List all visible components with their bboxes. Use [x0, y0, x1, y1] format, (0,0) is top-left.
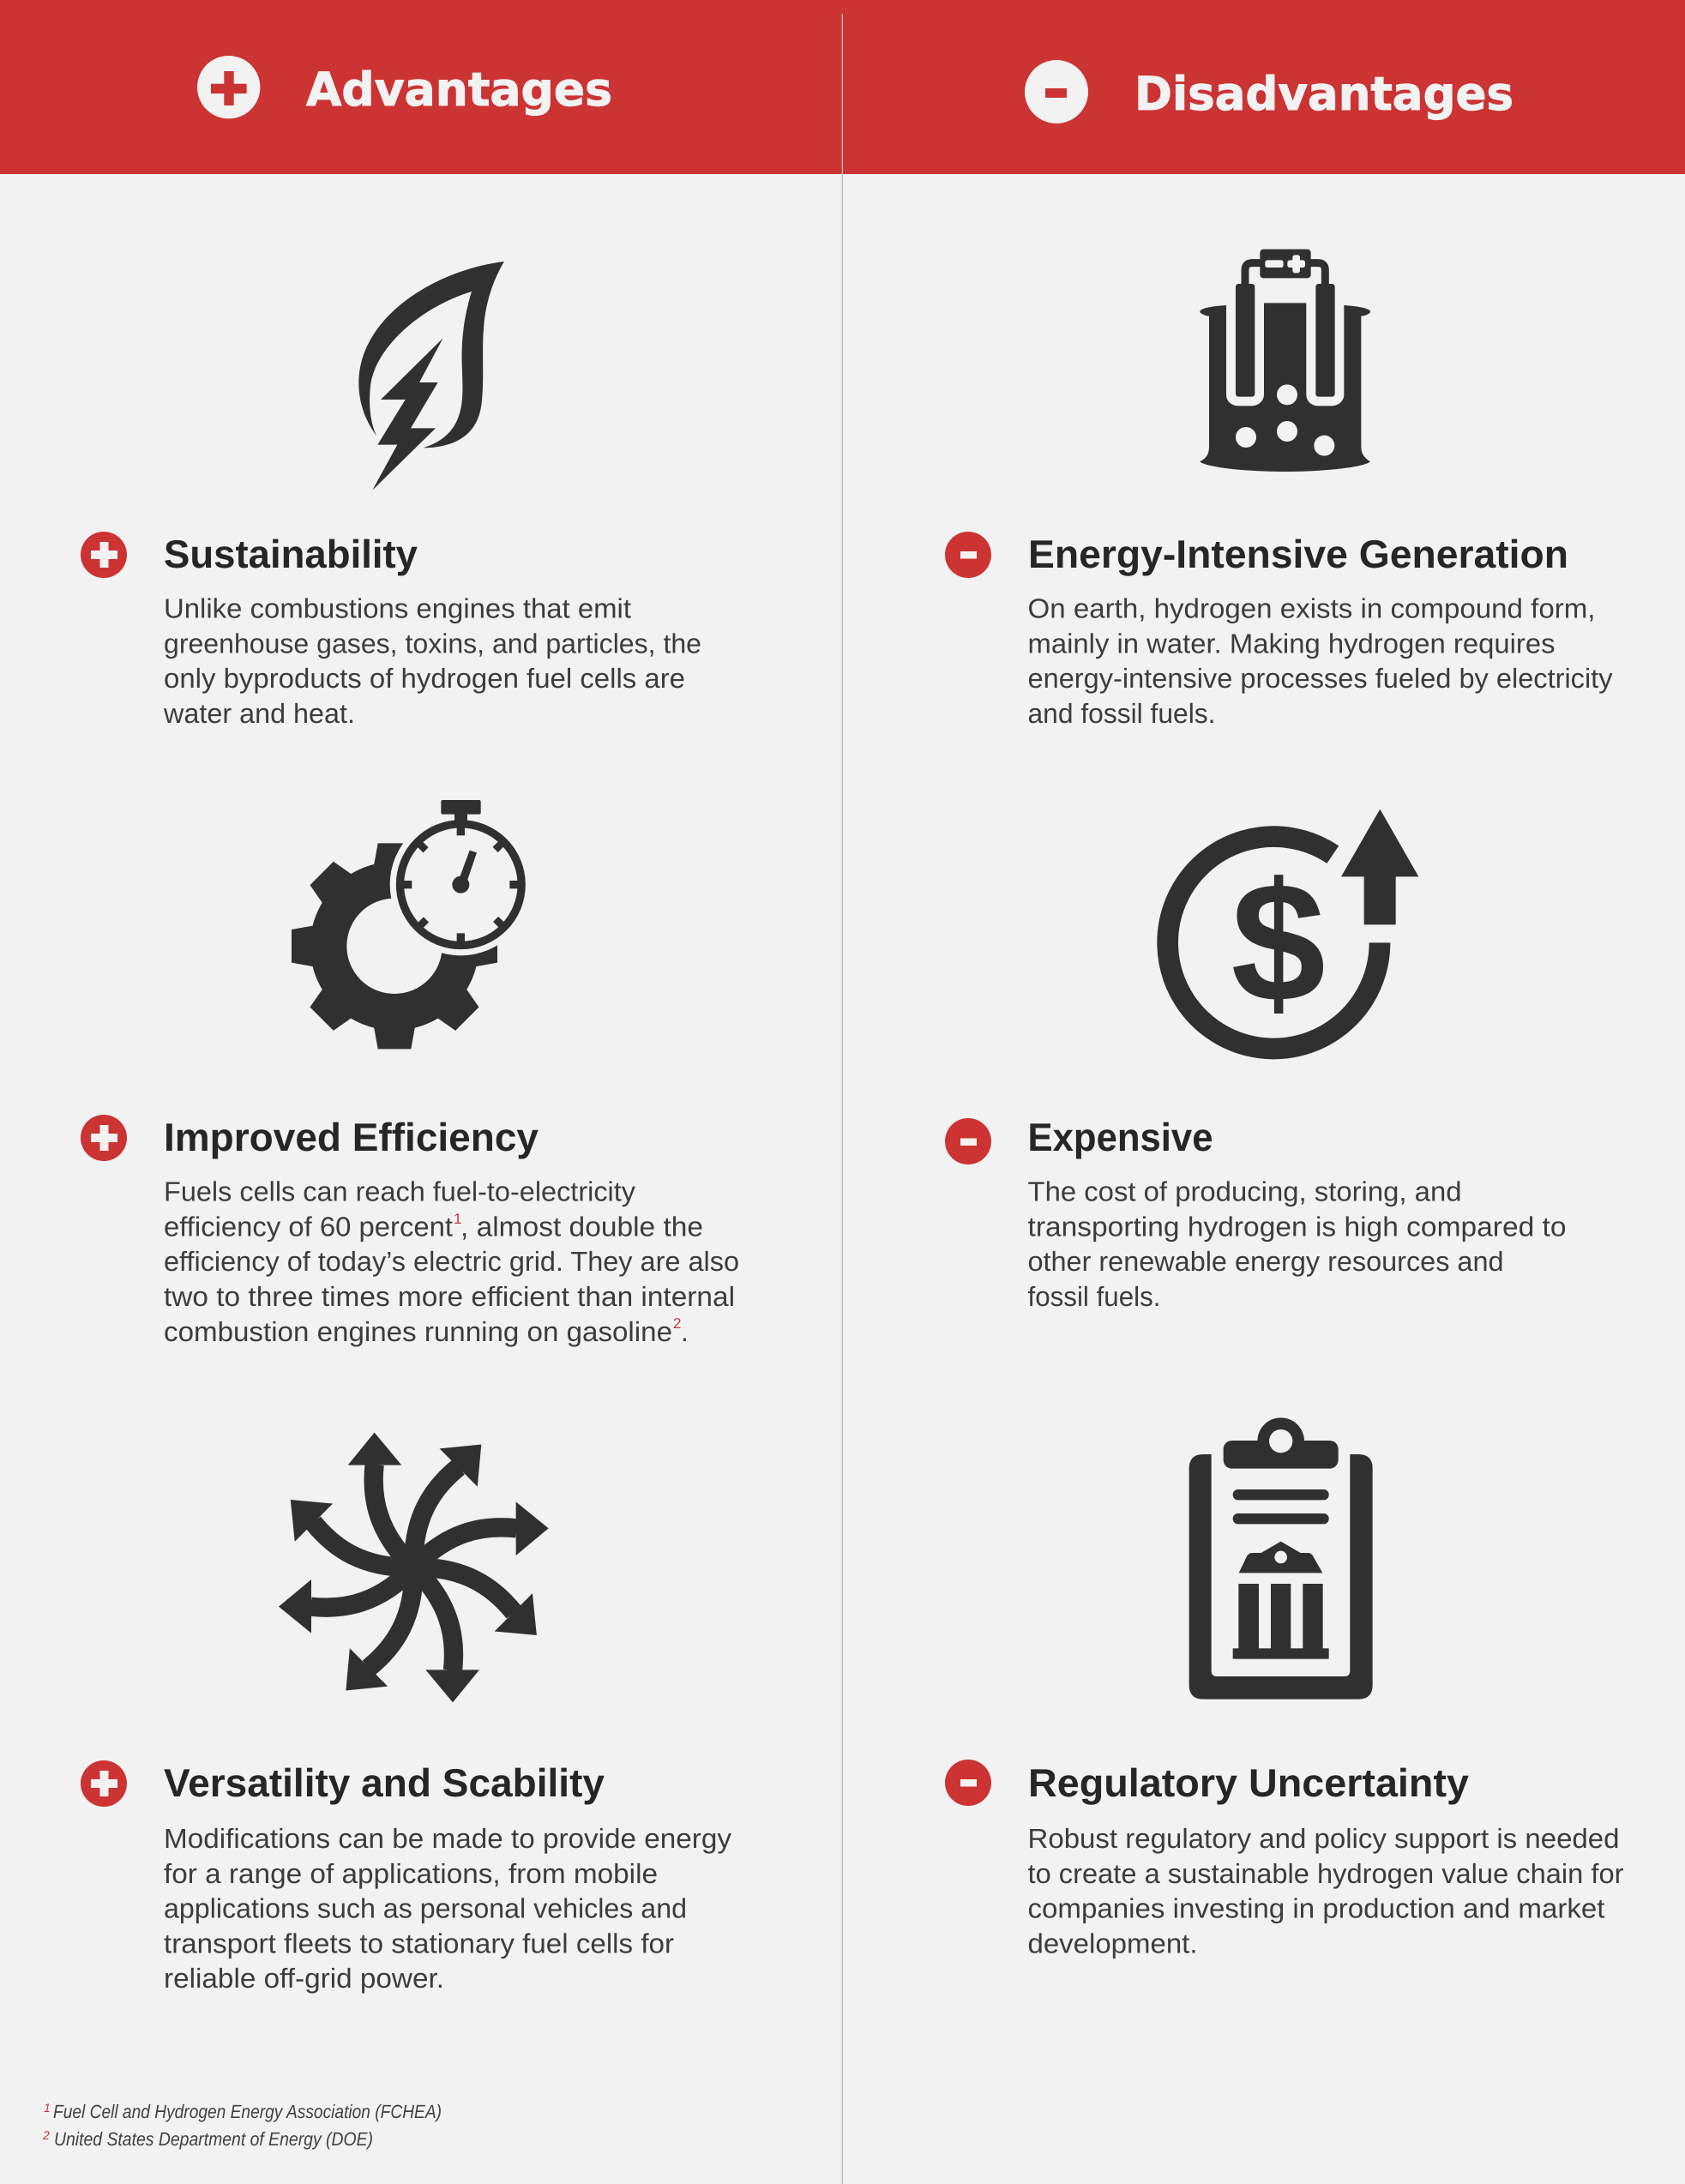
icon: clipboard with government building: [1189, 1417, 1373, 1700]
text block: efficiency of today’s electric grid. They are also: [164, 1246, 739, 1277]
text block: 2: [673, 1315, 681, 1332]
icon: header minus: [1025, 60, 1088, 123]
footnotes: Fuel Cell and Hydrogen Energy Association (FCHEA): [53, 2101, 442, 2122]
text block: transport fleets to stationary fuel cells for: [164, 1928, 674, 1958]
heading: Regulatory Uncertainty: [1028, 1760, 1469, 1805]
text block: Fuels cells can reach fuel-to-electricity: [164, 1176, 635, 1207]
text block: companies investing in production and market: [1027, 1893, 1605, 1924]
panel: Sustainability: [81, 532, 701, 729]
icon: plus badge: [81, 532, 127, 578]
text block: combustion engines running on gasoline: [164, 1316, 672, 1347]
text block: energy-intensive processes fueled by electricity: [1027, 663, 1612, 694]
text block: [1027, 1823, 1624, 1958]
panel: Improved Efficiency: [81, 1115, 739, 1347]
text block: to create a sustainable hydrogen value chain for: [1027, 1858, 1624, 1889]
heading: Sustainability: [164, 532, 418, 576]
text block: [164, 1823, 731, 1994]
icon: minus badge: [945, 1760, 991, 1806]
heading: Energy-Intensive Generation: [1028, 532, 1568, 576]
heading: Expensive: [1027, 1115, 1213, 1159]
text block: other renewable energy resources and: [1027, 1246, 1504, 1277]
text block: efficiency of 60 percent: [164, 1211, 453, 1242]
icon: minus badge: [945, 532, 991, 578]
icon: battery electrolysis beaker: [1200, 250, 1370, 472]
icon: gear with stopwatch: [292, 800, 532, 1049]
text block: mainly in water. Making hydrogen requires: [1027, 628, 1556, 659]
text block: reliable off-grid power.: [164, 1963, 444, 1994]
heading: Advantages: Advantages: [306, 63, 612, 117]
text block: Unlike combustions engines that emit: [164, 593, 631, 624]
text block: [1027, 593, 1612, 729]
heading: Versatility and Scability: [164, 1760, 605, 1805]
text block: fossil fuels.: [1027, 1281, 1161, 1312]
heading: Advantages: [197, 56, 612, 118]
icon: minus badge: [945, 1118, 991, 1164]
text block: 1: [454, 1211, 461, 1227]
text block: for a range of applications, from mobile: [164, 1858, 658, 1889]
text block: On earth, hydrogen exists in compound form,: [1027, 593, 1595, 624]
text block: [163, 593, 701, 729]
icon: plus badge: [81, 1115, 127, 1161]
text block: development.: [1027, 1928, 1197, 1958]
panel: Versatility and Scability: [81, 1760, 731, 1994]
footnotes: 1: [44, 2101, 51, 2115]
text block: greenhouse gases, toxins, and particles, the: [164, 628, 701, 659]
icon: dollar in circle with up arrow: $: [1231, 847, 1326, 1038]
icon: leaf with lightning bolt: [358, 262, 504, 490]
text block: The cost of producing, storing, and: [1027, 1176, 1461, 1207]
icon: dollar in circle with up arrow: [1168, 809, 1418, 1049]
footnotes: [42, 2101, 442, 2150]
text block: applications such as personal vehicles and: [164, 1893, 687, 1924]
text block: Robust regulatory and policy support is needed: [1027, 1823, 1619, 1854]
text block: [1027, 1176, 1566, 1312]
icon: swirl of eight arrows: [272, 1426, 556, 1709]
heading: Improved Efficiency: [164, 1115, 539, 1159]
text block: Modifications can be made to provide energy: [164, 1823, 731, 1854]
heading: Disadvantages: [1025, 60, 1513, 123]
panel: Expensive: [945, 1115, 1566, 1312]
icon: header plus: [197, 56, 260, 118]
text block: water and heat.: [163, 698, 355, 729]
text block: two to three times more efficient than internal: [164, 1281, 735, 1312]
text block: transporting hydrogen is high compared to: [1027, 1211, 1566, 1242]
text block: only byproducts of hydrogen fuel cells are: [164, 663, 685, 694]
icon: plus badge: [81, 1760, 127, 1807]
footnotes: 2: [42, 2128, 50, 2142]
heading: Disadvantages: Disadvantages: [1134, 67, 1513, 121]
text block: .: [681, 1316, 689, 1347]
text block: [164, 1176, 739, 1347]
text block: and fossil fuels.: [1027, 698, 1216, 729]
text block: , almost double the: [460, 1211, 703, 1242]
header band: [0, 0, 1685, 174]
footnotes: United States Department of Energy (DOE): [54, 2128, 373, 2150]
panel: Regulatory Uncertainty: [945, 1760, 1624, 1958]
panel: Energy-Intensive Generation: [945, 532, 1612, 729]
